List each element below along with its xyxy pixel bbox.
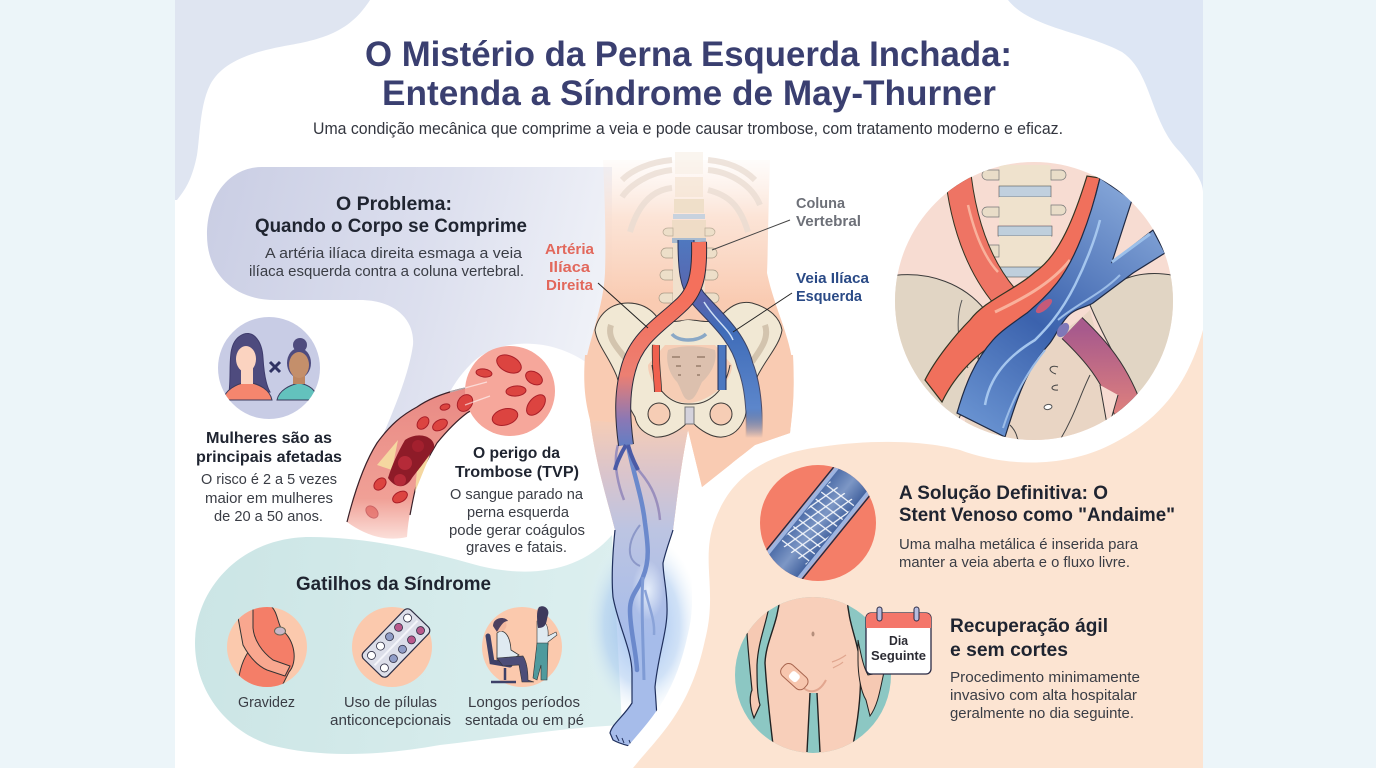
text: fast recovery: geralmente no dia seguinte. (950, 706, 1134, 722)
label: long periods sitting or standing: Longos períodos (468, 695, 580, 711)
text: fast recovery: Recuperação ágil (950, 616, 1108, 637)
anatomy: pelvis (595, 302, 782, 437)
title: Entenda a Síndrome de May-Thurner (382, 74, 996, 113)
leader line: veia (733, 293, 792, 332)
label: veia ilíaca esquerda: Veia Ilíaca (796, 271, 870, 287)
label: artéria ilíaca direita: Direita (546, 278, 594, 294)
text: definitive solution: manter a veia aberta e o fluxo livre. (899, 555, 1130, 571)
left leg with swelling (590, 420, 688, 747)
label: veia ilíaca esquerda: Esquerda (796, 289, 863, 305)
icon: two women (218, 317, 320, 419)
icon: sitting and standing (482, 606, 562, 687)
text: thrombosis danger: O perigo da (473, 445, 560, 462)
label: contraceptive pills: anticoncepcionais (330, 713, 451, 729)
text: definitive solution: Uma malha metálica é inserida para (899, 537, 1139, 553)
icon: next-day calendar (866, 607, 931, 674)
right page margin (1203, 180, 1376, 768)
icon: contraceptive pills (352, 607, 432, 687)
label: artéria ilíaca direita: Artéria (545, 242, 595, 258)
text: fast recovery: e sem cortes (950, 640, 1068, 661)
text: thrombosis danger: O sangue parado na (450, 487, 584, 503)
text: fast recovery: Procedimento minimamente (950, 670, 1140, 686)
icon: recovery body with bandage (735, 595, 891, 760)
illustration: magnified vein compression (880, 162, 1180, 445)
label: artéria ilíaca direita (545, 242, 595, 294)
panel: triggers background (195, 535, 622, 754)
text: definitive solution: A Solução Definitiva: O (899, 483, 1108, 504)
label: pregnancy: Gravidez (238, 695, 295, 711)
anatomy: right iliac artery (615, 242, 699, 470)
central canvas (175, 0, 1203, 768)
text: the problem: Quando o Corpo se Comprime (255, 216, 527, 237)
decorative corner top right (1008, 0, 1203, 192)
title: O Mistério da Perna Esquerda Inchada: (365, 35, 1012, 74)
label: coluna vertebral: Vertebral (796, 214, 861, 230)
title (365, 35, 1012, 113)
icon: next-day calendar: Seguinte (871, 648, 926, 663)
subtitle: Uma condição mecânica que comprime a veia e pode causar trombose, com tratamento moderno e eficaz. (313, 120, 1063, 138)
label: coluna vertebral (796, 196, 861, 230)
text: thrombosis danger: pode gerar coágulos (449, 523, 585, 539)
anatomy: ribs (622, 160, 760, 232)
icon: next-day calendar: Dia (889, 633, 909, 648)
label: long periods sitting or standing (465, 695, 584, 729)
leg glow (584, 533, 700, 717)
text: women most affected: Mulheres são as (206, 430, 332, 447)
text: women most affected: maior em mulheres (205, 491, 333, 507)
text: women most affected: principais afetadas (196, 449, 342, 466)
illustration: blood clot in vessel (347, 346, 555, 539)
label: long periods sitting or standing: sentada ou em pé (465, 713, 584, 729)
label: artéria ilíaca direita: Ilíaca (549, 260, 591, 276)
leader line: artéria (598, 283, 648, 328)
text: the problem: ilíaca esquerda contra a coluna vertebral. (249, 264, 524, 280)
text: thrombosis danger: Trombose (TVP) (455, 464, 579, 481)
text: women most affected: de 20 a 50 anos. (214, 509, 323, 525)
text: fast recovery (950, 616, 1140, 722)
text: thrombosis danger: perna esquerda (467, 505, 570, 521)
anatomy: left iliac vein (686, 240, 754, 438)
icon: pregnancy (227, 605, 307, 690)
leader line: coluna (712, 220, 790, 250)
anatomy: torso and thighs (584, 160, 794, 530)
text: thrombosis danger: graves e fatais. (466, 540, 567, 556)
anatomy: spine (659, 152, 719, 303)
heading: triggers: Gatilhos da Síndrome (296, 574, 491, 595)
icon: venous stent (760, 465, 876, 581)
label: veia ilíaca esquerda (796, 271, 870, 305)
text: the problem: A artéria ilíaca direita esmaga a veia (265, 246, 523, 262)
text: the problem (249, 194, 527, 280)
panel: problem background (207, 167, 612, 525)
text: fast recovery: invasivo com alta hospitalar (950, 688, 1137, 704)
text: women most affected: O risco é 2 a 5 vezes (201, 472, 337, 488)
text: definitive solution: Stent Venoso como "Andaime" (899, 505, 1175, 526)
label: contraceptive pills: Uso de pílulas (344, 695, 437, 711)
decorative corner top left (175, 0, 370, 200)
panel: solution and recovery background (633, 330, 1203, 768)
panel: thrombosis background (416, 344, 618, 572)
text: women most affected (196, 430, 342, 525)
label: contraceptive pills (330, 695, 451, 729)
text: the problem: O Problema: (336, 194, 452, 215)
text: definitive solution (899, 483, 1175, 571)
text: thrombosis danger (449, 445, 585, 556)
label: coluna vertebral: Coluna (796, 196, 846, 212)
